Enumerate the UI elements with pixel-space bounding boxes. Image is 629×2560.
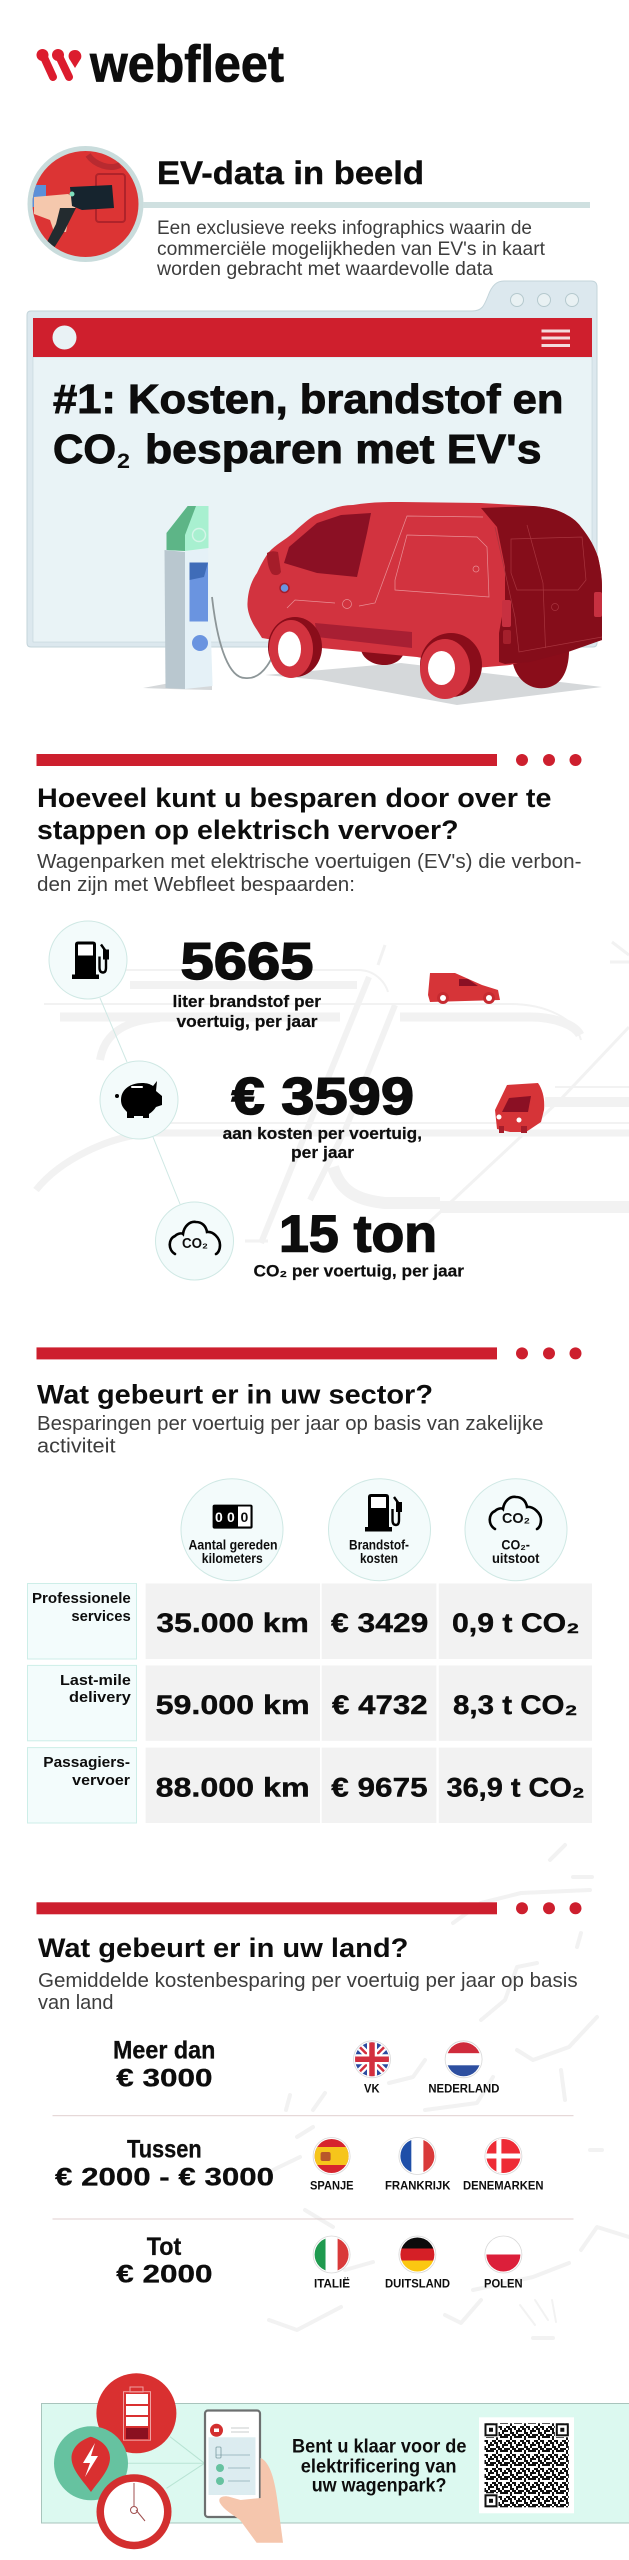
tier: up to 2000: [116, 2233, 212, 2289]
section bar 2: [36, 1347, 582, 1359]
flag: Netherlands: NEDERLAND: [428, 2082, 500, 2096]
table row: Passagiersvervoer: € 9675: [331, 1772, 428, 1802]
table header: kilometers: 0: [227, 1509, 235, 1525]
heading: country: Wat gebeurt er in uw land?: [38, 1933, 408, 1963]
illustration: charging station: [143, 506, 285, 690]
text: sector intro: Besparingen per voertuig per jaar op basis van zakelijke: [37, 1412, 544, 1435]
table header: fuel costs: kosten: [360, 1551, 398, 1566]
heading: sector: Wat gebeurt er in uw sector?: [37, 1379, 433, 1409]
intro text: [156, 217, 546, 280]
table row: Professionele services: [28, 1584, 592, 1659]
headline: besparen met EV's: [145, 426, 542, 472]
table header: CO2 emissions: uitstoot: [492, 1551, 540, 1566]
heading: EV-data in beeld: [157, 155, 424, 191]
section bar 1: [36, 754, 582, 766]
heading: savings question: Hoeveel kunt u besparen door over te: [37, 783, 552, 813]
table header: kilometers: 0: [240, 1509, 248, 1525]
header: EV-data in beeld: [28, 146, 590, 280]
heading: savings question: stappen op elektrisch vervoer?: [37, 815, 458, 845]
CTA text: uw wagenpark?: [312, 2476, 446, 2497]
text: savings intro: den zijn met Webfleet bespaarden:: [37, 873, 355, 896]
tier: up to 2000: Tot: [147, 2233, 182, 2261]
table header: CO2 emissions: [465, 1479, 567, 1581]
flag: Spain: [310, 2138, 354, 2192]
background: road lines: [36, 942, 629, 1243]
table row: Last-mile delivery: € 4732: [332, 1690, 428, 1720]
flag: Italy: [313, 2236, 350, 2291]
illustration: red van: [247, 502, 602, 705]
logo: webfleet: webfleet: [89, 36, 284, 94]
connector lines: [128, 2437, 204, 2488]
table row: Passagiersvervoer: vervoer: [72, 1772, 130, 1789]
text: savings intro: Wagenparken met elektrische voertuigen (EV's) die verbon-: [37, 850, 582, 873]
icon: small red van side: [428, 973, 500, 1004]
flag: Netherlands: [428, 2041, 500, 2096]
text: country intro: Gemiddelde kostenbesparing per voertuig per jaar op basis: [38, 1969, 578, 1992]
connector lines: [100, 998, 180, 1204]
stat: 5665 liter: [172, 933, 321, 1031]
flag: Germany: [385, 2236, 450, 2291]
divider: [52, 2115, 574, 2116]
tier: between 2000 and 3000: [55, 2136, 274, 2192]
icon: hand plugging in charger: [28, 146, 144, 262]
table row: Professionele services: € 3429: [331, 1608, 428, 1638]
flag: France: FRANKRIJK: [385, 2178, 451, 2192]
table header: fuel costs: Brandstof-: [349, 1538, 409, 1552]
table row: Last-mile delivery: 59.000 km: [156, 1690, 310, 1720]
background: Europe map: [269, 1845, 629, 2338]
charging plug: [280, 584, 289, 592]
tier: more than 3000: Meer dan: [113, 2036, 215, 2064]
tier: between 2000 and 3000: Tussen: [127, 2136, 202, 2164]
stat: 3599 euro: aan kosten per voertuig,: [223, 1124, 422, 1143]
icon: clock: [96, 2474, 172, 2549]
stat: 3599 euro: per jaar: [291, 1143, 354, 1162]
flag: UK: VK: [364, 2082, 380, 2096]
QR code: [479, 2417, 574, 2513]
table row: Passagiersvervoer: [28, 1748, 592, 1823]
table row: Last-mile delivery: 8,3 t CO₂: [453, 1690, 578, 1720]
table row: Passagiersvervoer: 88.000 km: [156, 1772, 310, 1802]
headline: #1: Kosten, brandstof en: [53, 376, 564, 422]
flag: Denmark: [463, 2138, 544, 2192]
icon: CO2 cloud: [156, 1202, 234, 1280]
table row: Passagiersvervoer: 36,9 t CO₂: [446, 1772, 585, 1802]
text: country intro: van land: [38, 1991, 114, 2014]
text: sector intro: activiteit: [37, 1434, 116, 1458]
table header: kilometers: Aantal gereden: [188, 1538, 278, 1552]
flag: Poland: POLEN: [484, 2277, 523, 2291]
flag: UK: [354, 2041, 390, 2096]
table row: Professionele services: Professionele: [32, 1590, 131, 1607]
table row: Last-mile delivery: Last-mile: [60, 1672, 131, 1689]
table header: kilometers: [181, 1479, 283, 1581]
stat: 3599 euro: € 3599: [232, 1068, 414, 1126]
panel: call to action: [42, 2373, 629, 2549]
divider: [52, 2218, 574, 2220]
headline: CO: [53, 426, 116, 472]
flag: Poland: [484, 2236, 523, 2291]
intro text: worden gebracht met waardevolle data: [156, 258, 493, 280]
text: country intro: [38, 1969, 578, 2014]
section bar 3: [36, 1902, 582, 1914]
stat: 15 ton CO2: [254, 1206, 464, 1281]
table row: Professionele services: services: [71, 1608, 131, 1625]
icon: battery: [96, 2373, 176, 2453]
stat: 15 ton CO2: CO₂ per voertuig, per jaar: [254, 1262, 464, 1281]
stat: 5665 liter: voertuig, per jaar: [176, 1012, 318, 1031]
flag: Denmark: DENEMARKEN: [463, 2178, 544, 2192]
tier: more than 3000: [113, 2036, 215, 2093]
table row: Professionele services: 0,9 t CO₂: [452, 1608, 580, 1638]
table row: Professionele services: 35.000 km: [156, 1608, 309, 1638]
stat: 5665 liter: liter brandstof per: [172, 992, 321, 1011]
icon: small red van front: [495, 1083, 544, 1133]
flag: Italy: ITALIË: [314, 2276, 350, 2291]
stat: 5665 liter: 5665: [180, 933, 314, 991]
CTA text: [292, 2437, 466, 2497]
flag: Germany: DUITSLAND: [385, 2277, 450, 2291]
headline: 2: [117, 450, 130, 473]
tier: more than 3000: € 3000: [116, 2065, 212, 2093]
icon: piggy bank: [100, 1061, 178, 1139]
intro text: Een exclusieve reeks infographics waarin de: [157, 217, 532, 239]
cable: [212, 592, 285, 678]
stat: 15 ton CO2: 15 ton: [279, 1206, 437, 1264]
table header: CO2 emissions: CO₂-: [501, 1538, 530, 1552]
CTA text: Bent u klaar voor de: [292, 2437, 466, 2458]
tier: up to 2000: € 2000: [116, 2261, 212, 2289]
table row: Last-mile delivery: [28, 1665, 592, 1741]
table header: fuel costs: [328, 1479, 430, 1581]
tier: between 2000 and 3000: € 2000 - € 3000: [55, 2164, 274, 2192]
stat: 3599 euro: [223, 1068, 422, 1162]
heading: savings question: [37, 783, 552, 845]
intro text: commerciële mogelijkheden van EV's in kaart: [157, 238, 546, 260]
table header: CO2 emissions: CO₂: [502, 1510, 530, 1527]
text: sector intro: [37, 1412, 544, 1458]
icon: phone in hand: [205, 2410, 283, 2543]
table header: kilometers: 0: [215, 1509, 223, 1525]
flag: France: [385, 2138, 451, 2192]
icon: charging pin: [54, 2426, 128, 2500]
panel: browser window: [27, 281, 597, 647]
headline: [53, 376, 564, 473]
icon: CO2 cloud: CO₂: [182, 1236, 208, 1252]
CTA text: elektrificering van: [301, 2456, 456, 2477]
table row: Last-mile delivery: delivery: [69, 1689, 132, 1706]
flag: Spain: SPANJE: [310, 2178, 354, 2192]
table row: Passagiersvervoer: Passagiers-: [43, 1754, 130, 1771]
table header: kilometers: kilometers: [202, 1551, 263, 1566]
text: savings intro: [37, 850, 582, 896]
icon: fuel pump: [49, 921, 127, 999]
